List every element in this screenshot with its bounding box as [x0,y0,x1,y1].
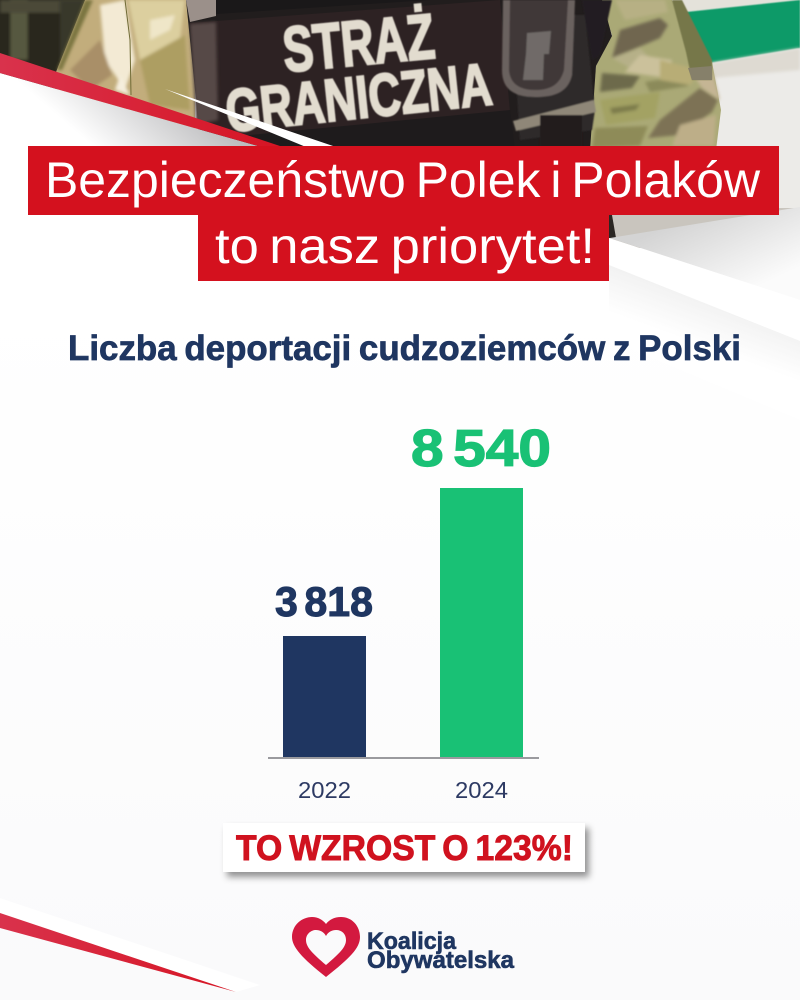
label 2024: 2024 [455,777,508,803]
title line 1 box [28,146,779,215]
bar 2024 [440,488,523,757]
logo: Koalicja Obywatelska [292,917,515,977]
chart axis [268,757,539,759]
decorative top-left white wedge with grey shade [0,73,258,160]
photo background: vehicle with green stripe [600,0,800,248]
photo background: dark left scene [0,0,110,150]
value 2022: 3 818 [275,578,373,625]
decorative white sliver [165,89,336,147]
logo text line 2: Obywatelska [367,947,515,974]
patch lettering: STRAŻ GRANICZNA [222,0,495,145]
callout box [223,823,585,872]
callout text: TO WZROST O 123%! [236,829,573,868]
title line 2 box [198,215,609,281]
chart heading: Liczba deportacji cudzoziemców z Polski [68,329,741,368]
bar chart [268,420,551,803]
title line 2 text: to nasz priorytet! [215,218,595,274]
value 2024: 8 540 [411,420,551,478]
decorative right white wedge [609,207,800,420]
icon: heart [292,917,360,977]
tactical vest [186,0,612,150]
logo text line 1: Koalicja [367,928,457,955]
patch lettering: STRAŻ GRANICZNA: GRANICZNA [222,50,495,145]
decorative top-left red wedge [0,53,280,146]
callout: increase [223,823,585,872]
vest pouch with buckle [502,0,612,147]
right sleeve, camouflage [588,0,721,150]
title banner [28,146,779,281]
left sleeve, camouflage [56,0,195,150]
decorative bottom-left wedge [0,898,260,992]
photo: border guard officer [0,0,800,248]
bar 2022 [283,636,366,757]
label 2022: 2022 [298,777,351,803]
title line 1 text: Bezpieczeństwo Polek i Polaków [45,152,761,208]
